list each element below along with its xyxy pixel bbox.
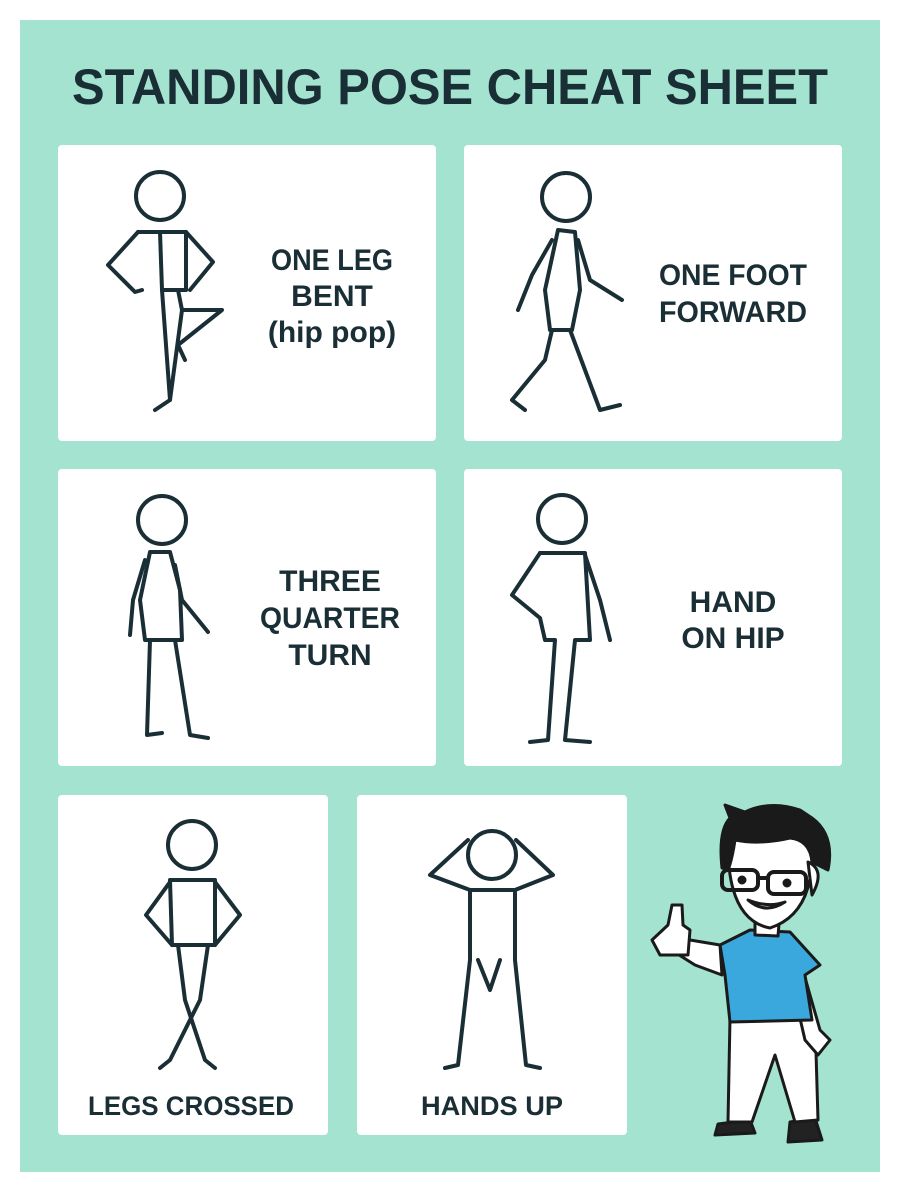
pants: [728, 1018, 818, 1122]
panel: three quarter turn: QUARTER: [260, 602, 400, 635]
face: [728, 828, 812, 928]
shoes: [715, 1120, 755, 1135]
panel: one foot forward: [464, 145, 842, 441]
panel: three quarter turn: TURN: [288, 639, 372, 672]
figure: hands up: [430, 831, 553, 1068]
left arm: [668, 925, 722, 975]
ear: [808, 862, 818, 895]
figure: walking: [512, 173, 622, 410]
glasses: [722, 870, 806, 894]
title: STANDING POSE CHEAT SHEET: [72, 59, 828, 115]
panel: one leg bent: [58, 145, 436, 441]
panel: one leg bent: BENT: [291, 280, 373, 313]
figure: hand on hip: [512, 495, 610, 742]
shirt: [720, 930, 820, 1022]
panel: hands up: [357, 795, 627, 1135]
figure: legs crossed: [146, 821, 240, 1068]
thumb hand: [652, 905, 690, 955]
panel: one foot forward: ONE FOOT: [659, 259, 807, 292]
panel: legs crossed: [58, 795, 328, 1135]
panel: hands up: HANDS UP: [421, 1091, 563, 1121]
panel: one leg bent: (hip pop): [268, 316, 396, 349]
figure: three quarter: [130, 496, 208, 738]
panel: hand on hip: ON HIP: [681, 622, 785, 655]
panel: one leg bent: ONE LEG: [271, 244, 393, 277]
panel: three quarter turn: [58, 469, 436, 766]
panel: hand on hip: HAND: [690, 586, 776, 619]
neck: [755, 912, 780, 936]
panel: three quarter turn: THREE: [279, 565, 381, 598]
panel: one foot forward: FORWARD: [659, 296, 807, 329]
right arm: [790, 960, 830, 1055]
smile: [748, 900, 785, 908]
panel: hand on hip: [464, 469, 842, 766]
hair: [721, 805, 830, 870]
panel: legs crossed: LEGS CROSSED: [88, 1091, 294, 1121]
character: thumbs up cartoon: [652, 805, 830, 1142]
figure: one leg bent: [108, 172, 222, 410]
